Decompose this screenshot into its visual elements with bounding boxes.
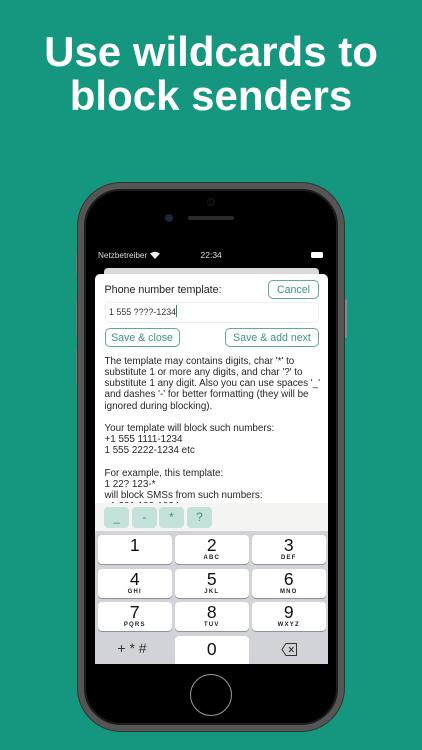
help text: For example, this template:: [104, 468, 223, 479]
key 4: 4: [130, 568, 140, 588]
key 3: [252, 535, 326, 564]
key 5: [175, 568, 248, 598]
key 9: 9: [284, 602, 294, 622]
key 7: [98, 602, 172, 631]
shortcut: underscore: _: [113, 510, 120, 524]
save and close button: [104, 328, 180, 347]
help text: substitute 1 any digit. Also you can use spaces '_': [104, 378, 320, 389]
carrier: Netzbetreiber: [98, 251, 147, 260]
phone mockup: [76, 182, 347, 732]
help text: and dashes '-' for better formatting (they will be: [104, 389, 309, 400]
sheet: [94, 274, 328, 503]
title: block senders: [70, 72, 352, 119]
label: phone number template: Phone number template:: [104, 284, 222, 296]
help text: +1 555 1111-1234: [104, 434, 182, 445]
key 1: [98, 535, 172, 564]
shortcut: question: [187, 507, 212, 528]
shortcut: dash: [132, 507, 157, 528]
key 4: GHI: [128, 588, 142, 594]
key 6: MNO: [280, 588, 298, 594]
shortcut: question: ?: [196, 510, 203, 524]
key 9: [252, 602, 326, 631]
key 4: [98, 568, 172, 598]
earpiece: [188, 216, 234, 220]
cancel button: Cancel: [277, 284, 310, 296]
help text: The template may contains digits, char '*' to: [104, 356, 294, 366]
shortcut: star: [159, 507, 184, 528]
shortcut: star: *: [169, 510, 174, 524]
key 7: PQRS: [124, 622, 146, 628]
key 6: [252, 568, 326, 598]
key 2: [175, 535, 248, 564]
keyboard: [94, 531, 328, 664]
save and add next button: [225, 328, 319, 347]
shortcut: dash: -: [142, 510, 146, 524]
status bar: [98, 250, 323, 260]
key 5: 5: [207, 568, 217, 588]
time: 22:34: [200, 250, 222, 260]
title: [44, 28, 378, 119]
shortcut: underscore: [104, 507, 129, 528]
key 2: ABC: [203, 555, 220, 561]
key 8: TUV: [204, 622, 220, 628]
key 3: 3: [284, 535, 294, 555]
cancel button: [268, 280, 319, 299]
phone body: [78, 183, 344, 731]
help text: ignored during blocking).: [104, 400, 212, 412]
key 3: DEF: [281, 555, 297, 561]
template input: 1 555 ????-1234: [109, 307, 176, 317]
key 7: 7: [130, 602, 140, 622]
help text: 1 555 2222-1234 etc: [104, 445, 195, 456]
key 0: 0: [207, 639, 217, 659]
help text: Your template will block such numbers:: [104, 423, 274, 434]
key 8: [175, 602, 248, 631]
key 0: [175, 636, 248, 664]
symbols key: + * #: [117, 640, 147, 656]
key 5: JKL: [204, 588, 219, 594]
back sheet: [104, 268, 319, 280]
save and close button: Save & close: [111, 332, 173, 344]
home button: [190, 674, 232, 716]
help text: substitute 1 or more any digits, and char '?' to: [104, 367, 303, 378]
side buttons: [76, 253, 80, 275]
help text: [104, 356, 320, 503]
wifi icon: [150, 252, 160, 259]
shortcut toolbar: [94, 503, 328, 531]
help text: 1 22? 123-*: [104, 479, 155, 490]
key 1: 1: [130, 535, 140, 555]
battery: [311, 252, 323, 258]
key 8: 8: [207, 602, 217, 622]
icon: backspace: [282, 643, 297, 656]
template input: [104, 302, 319, 323]
title: Use wildcards to: [44, 28, 378, 75]
key 6: 6: [284, 568, 294, 588]
key 9: WXYZ: [278, 622, 300, 628]
front camera: [165, 214, 173, 222]
help text: will block SMSs from such numbers:: [104, 490, 263, 501]
save and add next button: Save & add next: [233, 332, 311, 344]
key 2: 2: [207, 535, 217, 555]
proximity sensor: [207, 198, 215, 206]
